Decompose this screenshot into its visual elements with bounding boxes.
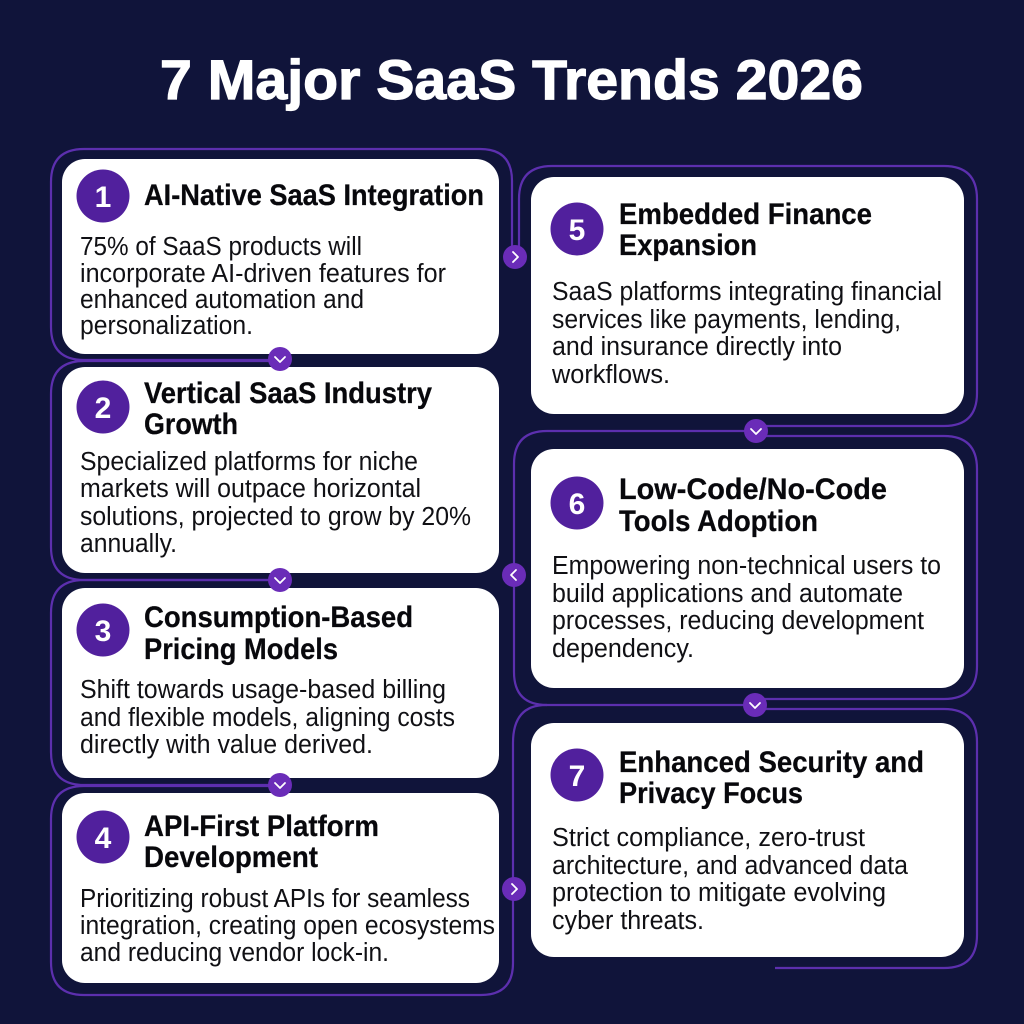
text 7	[552, 824, 909, 935]
heading 2: Growth	[144, 408, 238, 441]
text 1: 75% of SaaS products will	[80, 233, 362, 261]
heading 7: Enhanced Security and	[619, 746, 924, 779]
arrow: left column link	[502, 563, 526, 587]
text 6: processes, reducing development	[552, 607, 924, 635]
text 5: SaaS platforms integrating financial	[552, 278, 942, 306]
text 2: markets will outpace horizontal	[80, 475, 421, 503]
panel: trend 1	[62, 159, 499, 354]
heading 7	[619, 746, 924, 810]
heading 6	[619, 473, 887, 538]
arrow: lower column link	[502, 877, 526, 901]
badge 3	[76, 604, 130, 656]
text 4: integration, creating open ecosystems	[80, 912, 495, 940]
arrow: 2 to 3	[268, 568, 292, 592]
heading 6: Tools Adoption	[619, 505, 818, 538]
text 5: services like payments, lending,	[552, 306, 901, 334]
heading 4: API-First Platform	[144, 810, 379, 843]
text 3: and flexible models, aligning costs	[80, 704, 455, 732]
heading 3: Consumption-Based	[144, 601, 413, 634]
text 5: and insurance directly into	[552, 333, 842, 361]
text 6: dependency.	[552, 635, 694, 663]
badge 1	[76, 170, 130, 222]
text 2	[80, 448, 471, 558]
badge 5: 5	[569, 214, 585, 247]
connector lines	[51, 149, 977, 995]
badge 2	[76, 380, 130, 434]
text 5	[551, 278, 942, 389]
heading 5: Expansion	[619, 229, 757, 262]
heading 3	[144, 601, 413, 666]
text 6	[552, 552, 941, 663]
badge 7: 7	[569, 760, 585, 793]
text 3	[80, 676, 455, 759]
heading 2	[144, 377, 433, 441]
heading 4: Development	[144, 841, 318, 874]
text 7: cyber threats.	[552, 907, 704, 935]
badge 7	[550, 748, 604, 802]
text 7: protection to mitigate evolving	[552, 879, 886, 907]
arrow: 6 to 7	[743, 693, 767, 717]
text 2: Specialized platforms for niche	[80, 448, 418, 476]
badge 4	[76, 810, 130, 864]
heading 7: Privacy Focus	[619, 777, 803, 810]
text 6: Empowering non-technical users to	[552, 552, 941, 580]
panel: trend 2	[62, 367, 499, 573]
text 5: workflows.	[551, 361, 670, 389]
panel: trend 7	[531, 723, 964, 957]
badge 1: 1	[95, 181, 111, 214]
text 1	[80, 233, 446, 340]
heading 4	[144, 810, 379, 874]
panel: trend 5	[531, 177, 964, 414]
text 2: annually.	[80, 530, 177, 558]
text 4: Prioritizing robust APIs for seamless	[80, 885, 470, 913]
title: 7 Major SaaS Trends 2026	[160, 48, 863, 111]
text 4	[80, 885, 495, 967]
text 3: Shift towards usage-based billing	[80, 676, 446, 704]
badge 3: 3	[95, 615, 111, 648]
badge 2: 2	[95, 392, 111, 425]
panel: trend 4	[62, 793, 499, 983]
badge 4: 4	[95, 822, 112, 855]
arrow: 3 to 4	[268, 773, 292, 797]
heading 3: Pricing Models	[144, 633, 338, 666]
text 7: architecture, and advanced data	[552, 852, 909, 880]
badge 6: 6	[569, 488, 585, 521]
heading 2: Vertical SaaS Industry	[144, 377, 433, 410]
heading 5: Embedded Finance	[619, 198, 872, 231]
heading 6: Low-Code/No-Code	[619, 473, 887, 506]
text 4: and reducing vendor lock-in.	[80, 939, 389, 967]
panel: trend 6	[531, 449, 964, 688]
text 1: personalization.	[80, 312, 253, 340]
text 7: Strict compliance, zero-trust	[552, 824, 865, 852]
panel: trend 3	[62, 588, 499, 778]
heading 1: AI-Native SaaS Integration	[144, 179, 484, 212]
text 2: solutions, projected to grow by 20%	[80, 503, 471, 531]
text 6: build applications and automate	[552, 580, 903, 608]
badge 6	[550, 476, 604, 530]
text 3: directly with value derived.	[80, 731, 373, 759]
badge 5	[550, 202, 604, 256]
arrow: 1 to 2	[268, 347, 292, 371]
text 1: enhanced automation and	[80, 286, 364, 314]
arrow: 5 to 6	[744, 419, 768, 443]
heading 5	[619, 198, 872, 262]
arrow: 4 to 5	[503, 245, 527, 269]
text 1: incorporate AI-driven features for	[80, 260, 446, 288]
